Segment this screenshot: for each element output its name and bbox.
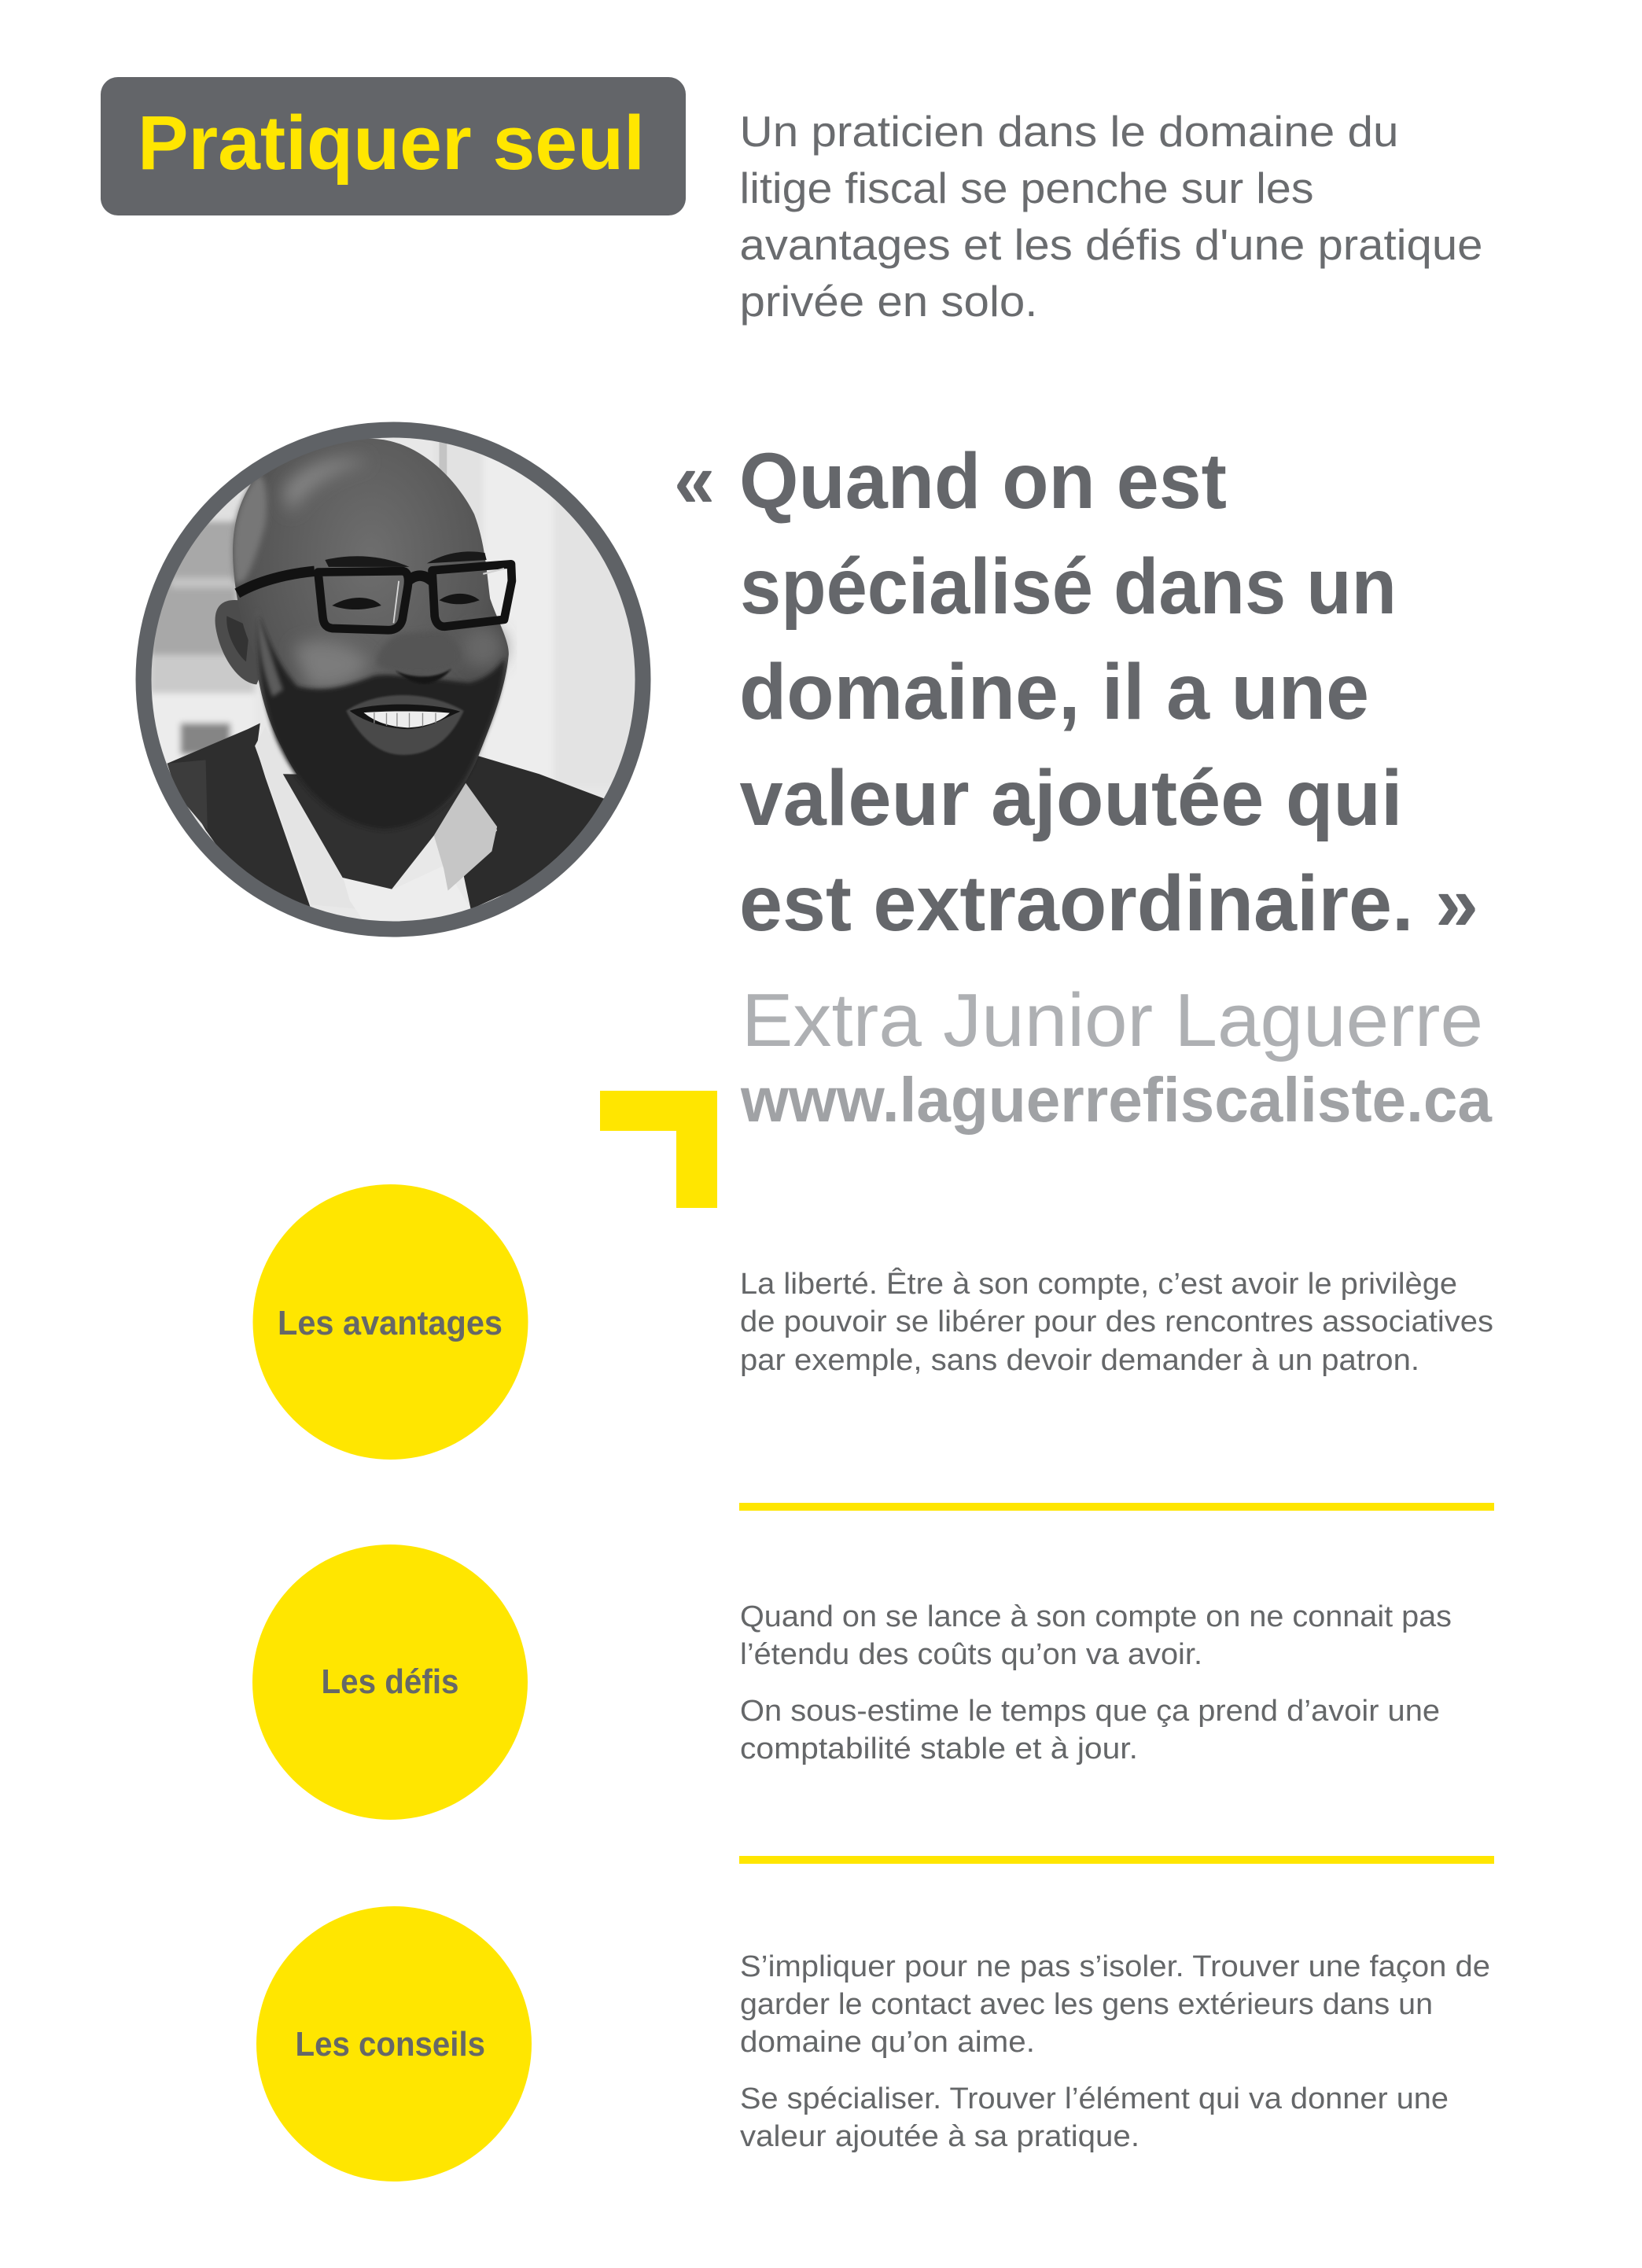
eyes <box>332 598 381 609</box>
text: defis: l’étendu des coûts qu’on va avoir. <box>740 1638 1202 1671</box>
circle: les conseils: Les conseils <box>296 2025 485 2064</box>
circle: les avantages <box>253 1184 528 1460</box>
text: avantages: par exemple, sans devoir demander à un patron. <box>740 1344 1419 1377</box>
title badge <box>101 77 686 215</box>
shirt <box>255 741 261 763</box>
neck <box>283 774 469 889</box>
text: conseils: valeur ajoutée à sa pratique. <box>740 2120 1139 2153</box>
beard <box>258 616 505 830</box>
intro text: Un praticien dans le domaine du <box>739 107 1398 156</box>
eyebrows <box>325 556 410 567</box>
circle: les conseils <box>256 1906 532 2181</box>
text: avantages: de pouvoir se libérer pour des rencontres associatives <box>740 1305 1493 1338</box>
title badge: Pratiquer seul <box>138 100 645 186</box>
text: defis: On sous-estime le temps que ça prend d’avoir une <box>740 1695 1440 1728</box>
jacket <box>167 723 311 909</box>
intro text: litige fiscal se penche sur les <box>739 164 1313 212</box>
glasses <box>237 564 512 630</box>
text: conseils: S’impliquer pour ne pas s’isoler. Trouver une façon de <box>740 1950 1490 1983</box>
yellow corner accent <box>600 1091 717 1208</box>
text: defis <box>740 1600 1452 1765</box>
quotation: valeur ajoutée qui <box>739 754 1403 842</box>
lip and smile <box>346 695 464 755</box>
text: conseils: garder le contact avec les gens extérieurs dans un <box>740 1988 1433 2021</box>
text: defis: comptabilité stable et à jour. <box>740 1732 1138 1765</box>
text: conseils <box>740 1950 1490 2153</box>
circle: les defis <box>252 1545 528 1820</box>
intro text: avantages et les défis d'une pratique <box>739 220 1483 269</box>
quotation: est extraordinaire. » <box>739 860 1478 948</box>
quotation: Quand on est <box>739 437 1227 525</box>
quotation <box>674 436 1478 948</box>
ear <box>215 600 259 684</box>
intro text: privée en solo. <box>739 277 1038 326</box>
nose <box>379 634 433 668</box>
quotation: domaine, il a une <box>739 648 1369 736</box>
text: avantages: La liberté. Être à son compte, c’est avoir le privilège <box>740 1267 1457 1301</box>
sideburn flecks <box>256 609 283 697</box>
website: www.laguerrefiscaliste.ca <box>740 1065 1492 1135</box>
quotation: spécialisé dans un <box>740 543 1397 631</box>
intro text <box>739 107 1483 326</box>
text: conseils: domaine qu’on aime. <box>740 2026 1035 2059</box>
portrait photo <box>143 429 643 930</box>
circle: les defis: Les défis <box>321 1662 459 1701</box>
opening quote mark: « <box>674 436 715 525</box>
text: conseils: Se spécialiser. Trouver l’élément qui va donner une <box>740 2082 1449 2115</box>
speaker name: Extra Junior Laguerre <box>742 978 1483 1062</box>
scalp shading <box>233 475 267 584</box>
text: defis: Quand on se lance à son compte on ne connait pas <box>740 1600 1452 1633</box>
head <box>233 439 509 782</box>
text: avantages <box>740 1267 1493 1377</box>
infographic page <box>101 77 1494 2181</box>
circle: les avantages: Les avantages <box>278 1304 503 1342</box>
